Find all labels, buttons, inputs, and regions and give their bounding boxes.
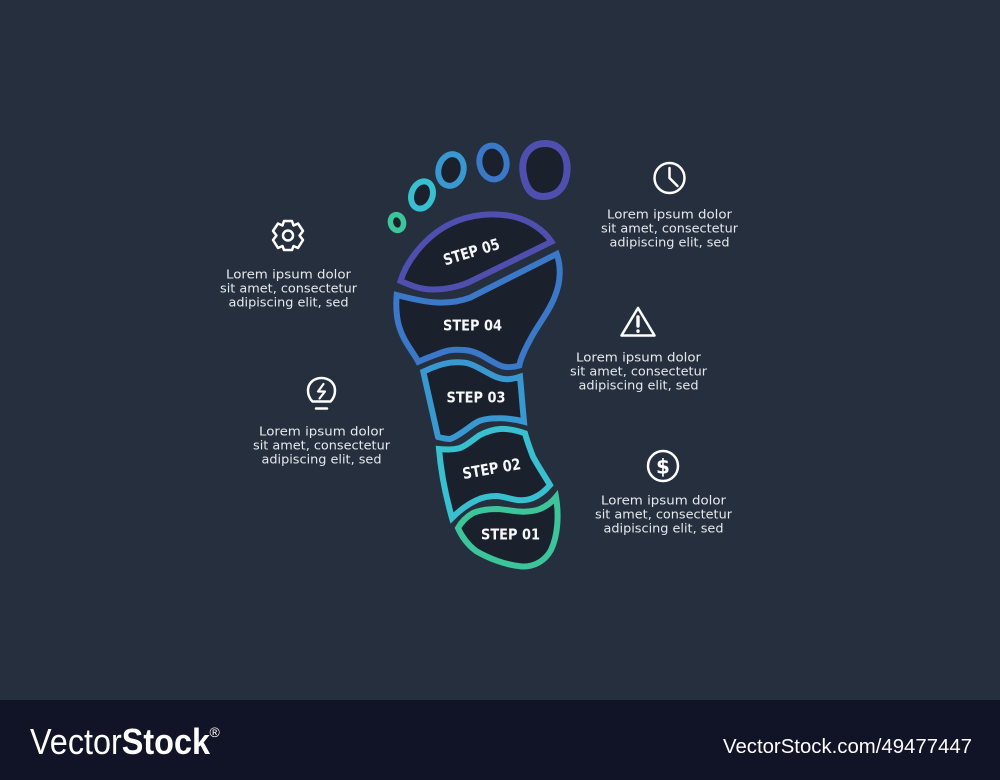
toe: big toe [523,144,567,196]
segment: step 03: STEP 03 [446,388,506,406]
icon: gear [273,221,303,250]
toe: little toe [389,213,405,232]
toe: second toe [477,143,509,182]
callout: dollar (bottom right) [595,451,733,536]
text block: warning callout: adipiscing elit, sed [578,378,698,392]
text block: dollar callout: sit amet, consectetur [595,506,733,522]
callout: light bulb (lower left) [253,378,391,466]
logo: registered mark: ® [210,724,220,740]
segment: step 04 [396,254,560,367]
image id: VectorStock.com/49477447 [723,736,972,758]
text block: dollar callout: Lorem ipsum dolor [601,492,727,508]
logo: VectorStock: VectorStock [30,721,211,762]
toe: third toe [435,151,467,189]
text block: clock callout: adipiscing elit, sed [610,234,730,250]
text block: gear callout: Lorem ipsum dolor [226,266,352,282]
segment: step 04: STEP 04 [443,316,502,334]
segment: step 01 [458,497,558,567]
footer bar [0,700,1000,780]
text block: dollar callout: adipiscing elit, sed [604,520,724,536]
icon: dollar coin: $ [656,454,670,478]
text block: bulb callout: sit amet, consectetur [253,438,391,452]
text block: warning callout: Lorem ipsum dolor [576,350,702,364]
text block: clock callout: Lorem ipsum dolor [607,206,733,222]
segment: step 01: STEP 01 [481,526,540,544]
callout: gear (top left) [220,221,358,310]
toe: fourth toe [407,178,437,212]
text block: bulb callout: adipiscing elit, sed [262,452,382,466]
icon: clock [654,163,684,193]
callout: warning (middle right) [570,308,708,392]
text block: warning callout: sit amet, consectetur [570,364,708,378]
segment: step 03 [423,362,524,439]
text block: gear callout: adipiscing elit, sed [228,294,348,310]
segment: step 05 [400,214,552,290]
icon: light bulb [308,378,335,408]
text block: gear callout: sit amet, consectetur [220,280,358,296]
footprint diagram [389,143,567,567]
icon: warning triangle [622,308,654,336]
callout: clock (top right) [601,163,739,250]
text block: bulb callout: Lorem ipsum dolor [259,424,385,438]
segment: step 05: STEP 05 [441,235,502,269]
segment: step 02: STEP 02 [461,455,522,483]
text block: clock callout: sit amet, consectetur [601,220,739,236]
segment: step 02 [439,429,550,518]
